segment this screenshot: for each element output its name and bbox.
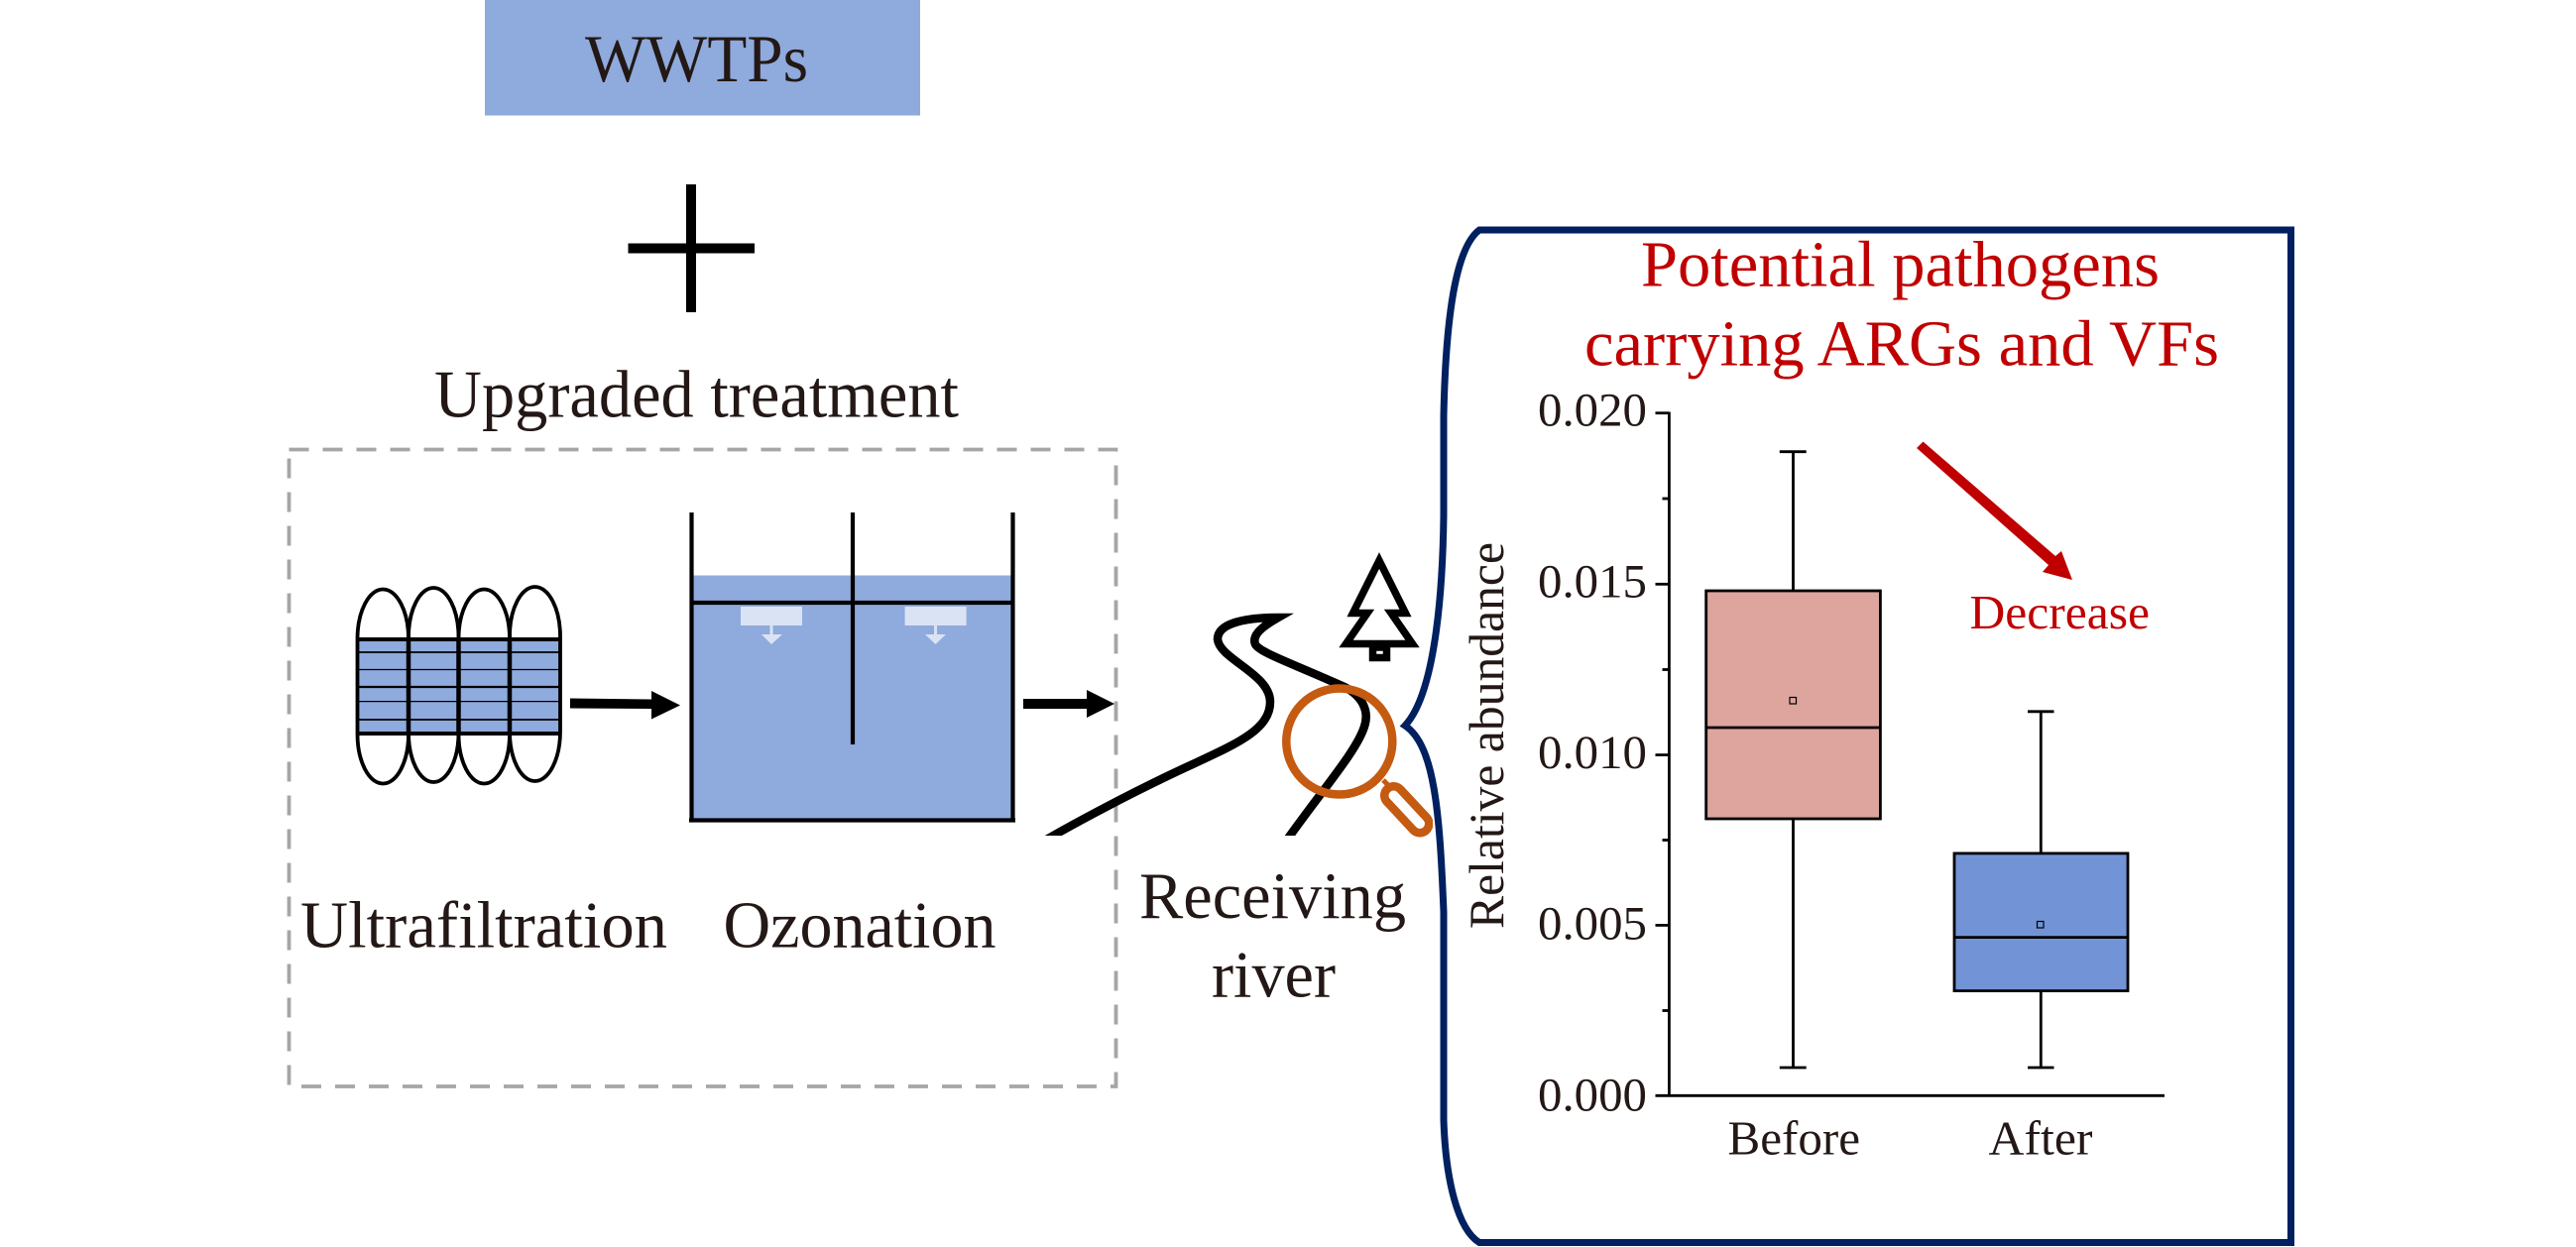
axes and ticks <box>1656 412 2165 1096</box>
y axis tick labels: 0.020 <box>1538 385 1647 436</box>
box: after <box>1954 712 2128 1068</box>
icon: ultrafiltration membrane modules <box>357 587 560 783</box>
y axis tick labels: 0.005 <box>1538 898 1647 950</box>
arrow: ultrafiltration to ozonation <box>570 691 680 720</box>
WWTPs box: WWTPs <box>585 21 808 96</box>
icon: river <box>1031 618 1366 849</box>
arrow: decrease trend <box>1917 442 2072 580</box>
y axis tick labels <box>1538 385 1647 1122</box>
panel: brace-shaped result frame <box>1405 230 2290 1243</box>
label: ultrafiltration: Ultrafiltration <box>300 888 667 962</box>
x axis labels: Before <box>1727 1110 1860 1165</box>
chart: relative abundance box plot <box>1459 385 2165 1165</box>
label: receiving river <box>1139 859 1406 1011</box>
y axis title: Relative abundance <box>1459 542 1514 929</box>
y axis tick labels: 0.000 <box>1538 1069 1647 1122</box>
panel: upgraded treatment dashed frame <box>290 450 1116 1086</box>
WWTPs box <box>485 0 920 115</box>
heading: potential pathogens: carrying ARGs and VFs <box>1584 307 2219 381</box>
chart: relative abundance box plot: After <box>1989 1110 2092 1165</box>
y axis tick labels: 0.010 <box>1538 727 1647 779</box>
label: decrease: Decrease <box>1969 585 2150 639</box>
label: receiving river: river <box>1212 938 1336 1011</box>
icon: ozonation tank <box>689 512 1015 822</box>
icon: tree <box>1347 561 1412 658</box>
heading: potential pathogens <box>1584 228 2219 381</box>
icon: magnifying glass <box>1286 688 1420 824</box>
arrow: ozonation to river <box>1023 690 1114 718</box>
label: receiving river: Receiving <box>1139 859 1406 933</box>
heading: upgraded treatment: Upgraded treatment <box>434 357 959 432</box>
heading: potential pathogens: Potential pathogens <box>1641 228 2160 301</box>
icon: plus sign <box>629 184 755 312</box>
box: before <box>1706 452 1880 1068</box>
y axis tick labels: 0.015 <box>1538 555 1647 609</box>
label: ozonation: Ozonation <box>724 888 995 962</box>
